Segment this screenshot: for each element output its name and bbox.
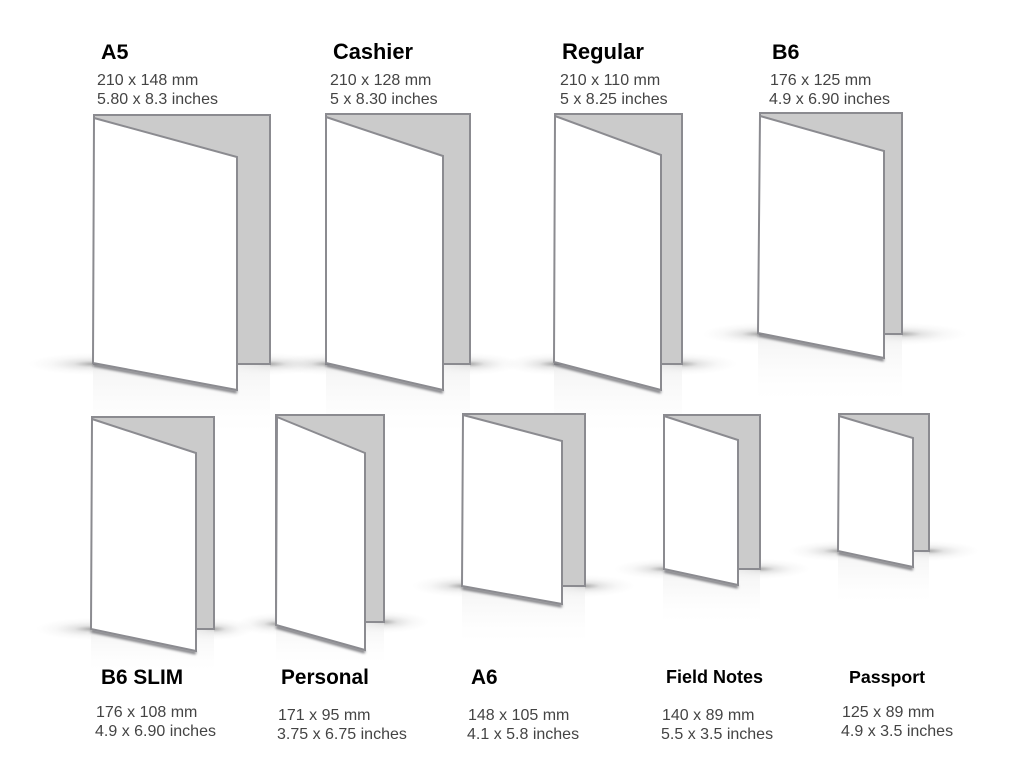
- notebook: Regular: 5 x 8.25 inches: [560, 91, 668, 108]
- notebook: Regular: Regular: [562, 39, 644, 64]
- notebook: Field Notes: 5.5 x 3.5 inches: [661, 726, 773, 743]
- notebook: B6 SLIM: 4.9 x 6.90 inches: [95, 723, 216, 740]
- notebook: Cashier: 5 x 8.30 inches: [330, 91, 438, 108]
- notebook: B6 SLIM: 176 x 108 mm: [96, 704, 197, 721]
- notebook: A6: [412, 414, 635, 743]
- notebook: Passport: 125 x 89 mm: [842, 704, 934, 721]
- notebook: A5: [28, 40, 325, 433]
- notebook: Personal: Personal: [281, 666, 369, 689]
- notebook: B6: 4.9 x 6.90 inches: [769, 91, 890, 108]
- notebook: A5: 5.80 x 8.3 inches: [97, 91, 218, 108]
- notebook: Field Notes: Field Notes: [666, 667, 763, 687]
- notebook: B6 SLIM: B6 SLIM: [101, 666, 183, 689]
- notebook: A6: A6: [471, 666, 498, 689]
- notebook: Cashier: 210 x 128 mm: [330, 72, 431, 89]
- notebook: Passport: [788, 414, 979, 740]
- notebook: Personal: 171 x 95 mm: [278, 707, 370, 724]
- notebook: Passport: Passport: [849, 667, 925, 687]
- notebook: B6: [703, 40, 967, 400]
- notebook: A6: 4.1 x 5.8 inches: [467, 726, 579, 743]
- notebook: A5: A5: [101, 40, 129, 64]
- notebook: Field Notes: 140 x 89 mm: [662, 707, 754, 724]
- notebook: B6: B6: [772, 40, 800, 64]
- notebook: Passport: 4.9 x 3.5 inches: [841, 723, 953, 740]
- notebook: Field Notes: [614, 415, 810, 743]
- notebook: B6 SLIM: [36, 417, 254, 740]
- notebook: A6: 148 x 105 mm: [468, 707, 569, 724]
- notebook: Cashier: Cashier: [333, 39, 413, 64]
- notebook: Regular: [504, 39, 737, 433]
- notebook: B6: 176 x 125 mm: [770, 72, 871, 89]
- notebook: A5: 210 x 148 mm: [97, 72, 198, 89]
- notebook: Regular: 210 x 110 mm: [560, 72, 660, 89]
- notebook: Personal: [236, 415, 429, 743]
- notebook: Personal: 3.75 x 6.75 inches: [277, 726, 407, 743]
- notebook: Cashier: [276, 39, 520, 433]
